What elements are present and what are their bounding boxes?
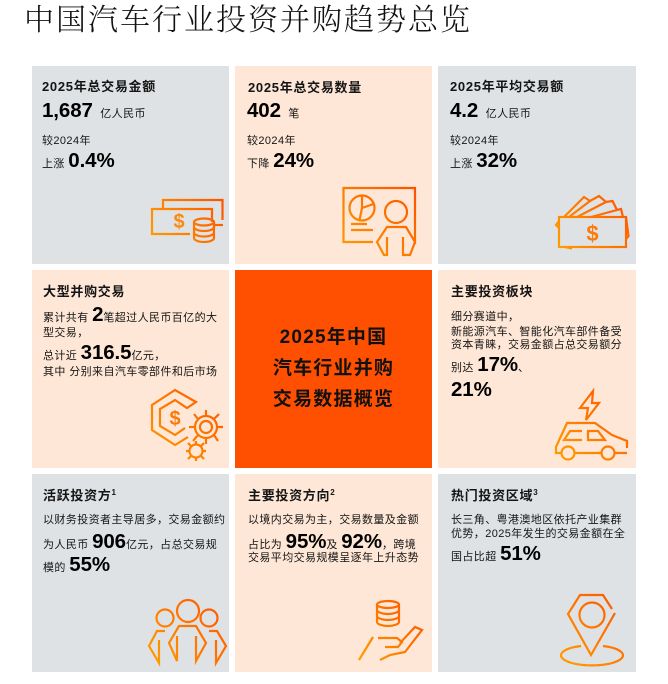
panel: hot regions xyxy=(438,474,636,672)
text: domestic deals: 以境内交易为主，交易数量及金额 xyxy=(248,514,419,526)
icon: presenter with chart xyxy=(342,186,416,256)
heading: total deal value: 2025年总交易金额 xyxy=(42,79,156,94)
text: line three: 资本青睐，交易金额占总交易额分 xyxy=(451,339,622,351)
text: sources: 其中 分别来自汽车零部件和后市场 xyxy=(43,366,217,378)
heading: hot regions: 热门投资区域3 xyxy=(451,488,538,503)
heading: deal count: 2025年总交易数量 xyxy=(248,80,362,95)
heading: large deals: 大型并购交易 xyxy=(43,284,125,299)
stat: 1,687: 1,687 亿人民币 xyxy=(42,99,146,122)
stat: 51%: 国占比超 51% xyxy=(451,542,541,565)
icon: group of people xyxy=(148,598,228,667)
text: financial investors: 以财务投资者主导居多，交易金额约 xyxy=(43,514,225,526)
stat: 906: 为人民币 906亿元，占总交易规 xyxy=(43,530,217,553)
text: line two: 新能源汽车、智能化汽车部件备受 xyxy=(451,326,622,338)
icon: hand holding coins xyxy=(358,600,424,661)
headline line 3: 交易数据概览 xyxy=(273,389,394,410)
text: cross-border trend: 交易平均交易规模呈逐年上升态势 xyxy=(248,552,419,564)
text: compared with 2024: 较2024年 xyxy=(450,135,499,147)
text: line two: 型交易， xyxy=(43,327,89,339)
stat: up 32%: 上涨 32% xyxy=(450,149,517,172)
stat: 402: 402 笔 xyxy=(247,99,300,122)
heading: key sectors: 主要投资板块 xyxy=(451,284,533,299)
stat: 21%: 21% xyxy=(451,378,492,401)
heading: investment direction: 主要投资方向2 xyxy=(248,488,335,503)
panel: key sectors xyxy=(438,270,636,468)
stat: 4.2: 4.2 亿人民币 xyxy=(450,99,531,122)
headline line 2: 汽车行业并购 xyxy=(273,358,394,379)
title: 中国汽车行业投资并购趋势总览 xyxy=(24,4,472,37)
text: compared with 2024: 较2024年 xyxy=(42,135,91,147)
stat: down 24%: 下降 24% xyxy=(247,149,314,172)
icon: electric car xyxy=(554,388,628,461)
stat: 316.5: 总计近 316.5亿元， xyxy=(43,341,166,364)
text: two deals above ten billion: 累计共有 2笔超过人民币百亿的大 xyxy=(43,303,217,326)
panel: investment direction xyxy=(235,474,432,672)
stat: 95% and 92%: 占比为 95%及 92%，跨境 xyxy=(248,530,416,553)
text: compared with 2024: 较2024年 xyxy=(247,135,296,147)
icon: hexagon dollar and gears xyxy=(150,388,223,461)
stat: 17%: 别达 17%、 xyxy=(451,353,529,376)
text: regions: 长三角、粤港澳地区依托产业集群 xyxy=(451,514,622,526)
panel: central headline xyxy=(235,270,432,468)
panel: large deals xyxy=(32,270,229,468)
panel: total deal value xyxy=(32,66,229,264)
heading: average deal value: 2025年平均交易额 xyxy=(450,79,564,94)
icon: hexagon dollar and gears: $ xyxy=(169,408,181,430)
stat: 55%: 模的 55% xyxy=(43,553,110,576)
panel: average deal value xyxy=(438,66,636,264)
stat: up 0.4%: 上涨 0.4% xyxy=(42,149,115,172)
icon: cash and coins xyxy=(150,198,224,244)
icon: cash and coins: $ xyxy=(173,211,185,233)
icon: map pin xyxy=(560,594,624,666)
icon: fan of bills: $ xyxy=(586,221,599,246)
panel: active investors xyxy=(32,474,229,672)
headline line 1: 2025年中国 xyxy=(280,327,387,348)
heading: active investors: 活跃投资方1 xyxy=(43,488,117,503)
icon: fan of bills xyxy=(554,194,630,250)
text: line two: 优势，2025年发生的交易金额在全 xyxy=(451,528,625,540)
panel: deal count xyxy=(235,66,432,264)
text: sub-sector intro: 细分赛道中， xyxy=(451,311,519,323)
